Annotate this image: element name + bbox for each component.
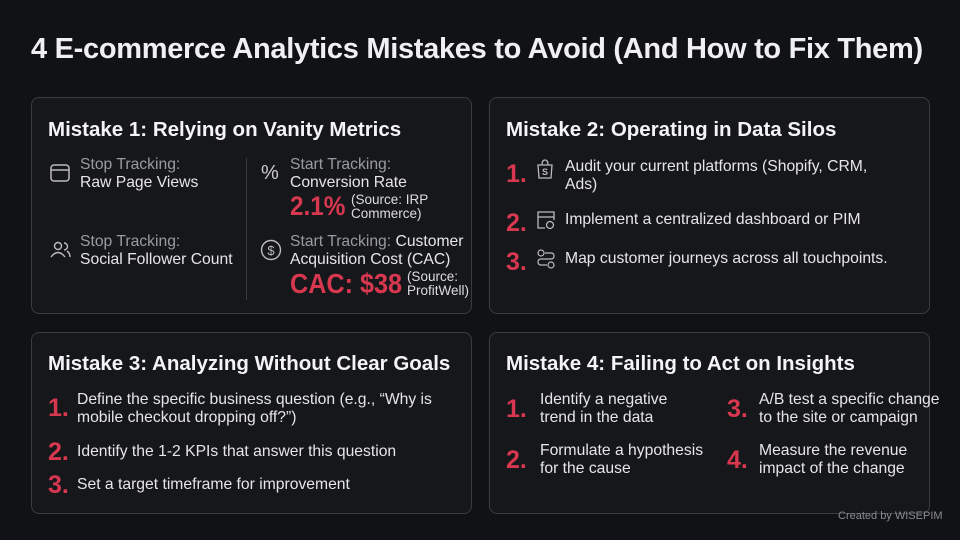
step 1: Define the specific business question (e.g., “Why is bbox=[77, 391, 432, 408]
step 3 bbox=[506, 248, 888, 276]
step 1 bbox=[506, 158, 867, 193]
icon: dollar bbox=[260, 240, 282, 260]
stop tracking: page views: Raw Page Views bbox=[80, 174, 198, 191]
step 1: 1. bbox=[506, 160, 527, 188]
stop tracking: page views: Stop Tracking: bbox=[80, 156, 180, 173]
panel: mistake 3 bbox=[31, 332, 472, 514]
title: 4 E-commerce Analytics Mistakes to Avoid (And How to Fix Them) bbox=[31, 33, 923, 65]
icon: users bbox=[50, 242, 71, 258]
stat: CAC $38: ProfitWell) bbox=[407, 283, 469, 298]
step 2: for the cause bbox=[540, 460, 631, 477]
icon: dollar: $ bbox=[267, 243, 275, 258]
step 3: Set a target timeframe for improvement bbox=[77, 476, 350, 493]
panel: mistake 4 bbox=[489, 332, 930, 514]
start tracking: conversion rate: Conversion Rate bbox=[290, 174, 407, 191]
stat: CAC $38: (Source: bbox=[407, 269, 458, 284]
stat: CAC $38: CAC: $38 bbox=[290, 268, 402, 299]
step 3: 3. bbox=[506, 248, 527, 276]
step 4: Measure the revenue bbox=[759, 442, 907, 459]
credit: Created by WISEPIM bbox=[838, 510, 943, 522]
icon: browser bbox=[50, 164, 70, 182]
divider bbox=[246, 158, 247, 300]
stat: 2.1%: (Source: IRP bbox=[351, 192, 428, 206]
step 1: Audit your current platforms (Shopify, CRM, bbox=[565, 158, 867, 175]
step 2: Implement a centralized dashboard or PIM bbox=[565, 211, 861, 228]
start tracking: conversion rate: Start Tracking: bbox=[290, 156, 391, 173]
stop tracking: page views bbox=[80, 156, 198, 191]
start tracking: CAC: Acquisition Cost (CAC) bbox=[290, 251, 450, 268]
panel: mistake 2 bbox=[489, 97, 930, 314]
step 3 bbox=[48, 471, 350, 499]
stat: 2.1%: Commerce) bbox=[351, 206, 422, 220]
stat: CAC $38 bbox=[290, 268, 469, 299]
step 2: 2. bbox=[506, 446, 527, 474]
step 3: Map customer journeys across all touchpoints. bbox=[565, 250, 888, 267]
step 1 bbox=[48, 391, 432, 426]
step 2: 2. bbox=[506, 209, 527, 237]
step 3: to the site or campaign bbox=[759, 409, 918, 426]
step 1: Ads) bbox=[565, 176, 597, 193]
step 1 bbox=[506, 391, 667, 426]
step 1: Identify a negative bbox=[540, 391, 667, 408]
step 1: 1. bbox=[48, 394, 69, 422]
start tracking: CAC bbox=[290, 233, 464, 268]
heading 3: Mistake 3: Analyzing Without Clear Goals bbox=[48, 352, 450, 375]
icon: percent: % bbox=[261, 162, 279, 184]
step 2 bbox=[48, 438, 396, 466]
step 4: impact of the change bbox=[759, 460, 905, 477]
step 3 bbox=[727, 391, 940, 426]
heading 2: Mistake 2: Operating in Data Silos bbox=[506, 118, 836, 141]
step 1: trend in the data bbox=[540, 409, 653, 426]
step 2 bbox=[506, 442, 703, 477]
heading 4: Mistake 4: Failing to Act on Insights bbox=[506, 352, 855, 375]
start tracking: conversion rate bbox=[290, 156, 407, 191]
step 3: 3. bbox=[727, 395, 748, 423]
stop tracking: followers: Stop Tracking: bbox=[80, 233, 180, 250]
step 1: 1. bbox=[506, 395, 527, 423]
step 1: S bbox=[542, 167, 548, 177]
heading 1: Mistake 1: Relying on Vanity Metrics bbox=[48, 118, 401, 141]
step 4: 4. bbox=[727, 446, 748, 474]
step 4 bbox=[727, 442, 907, 477]
step 2: Identify the 1-2 KPIs that answer this question bbox=[77, 443, 396, 460]
step 1: mobile checkout dropping off?”) bbox=[77, 409, 296, 426]
step 2: 2. bbox=[48, 438, 69, 466]
panel: mistake 1 bbox=[31, 97, 472, 314]
step 3: 3. bbox=[48, 471, 69, 499]
step 3: A/B test a specific change bbox=[759, 391, 940, 408]
stop tracking: followers bbox=[80, 233, 233, 268]
start tracking: CAC: Start Tracking: Customer bbox=[290, 233, 464, 250]
stat: 2.1%: 2.1% bbox=[290, 191, 345, 221]
step 2: Formulate a hypothesis bbox=[540, 442, 703, 459]
stop tracking: followers: Social Follower Count bbox=[80, 251, 233, 268]
step 2 bbox=[506, 209, 861, 237]
stat: 2.1% bbox=[290, 191, 428, 221]
